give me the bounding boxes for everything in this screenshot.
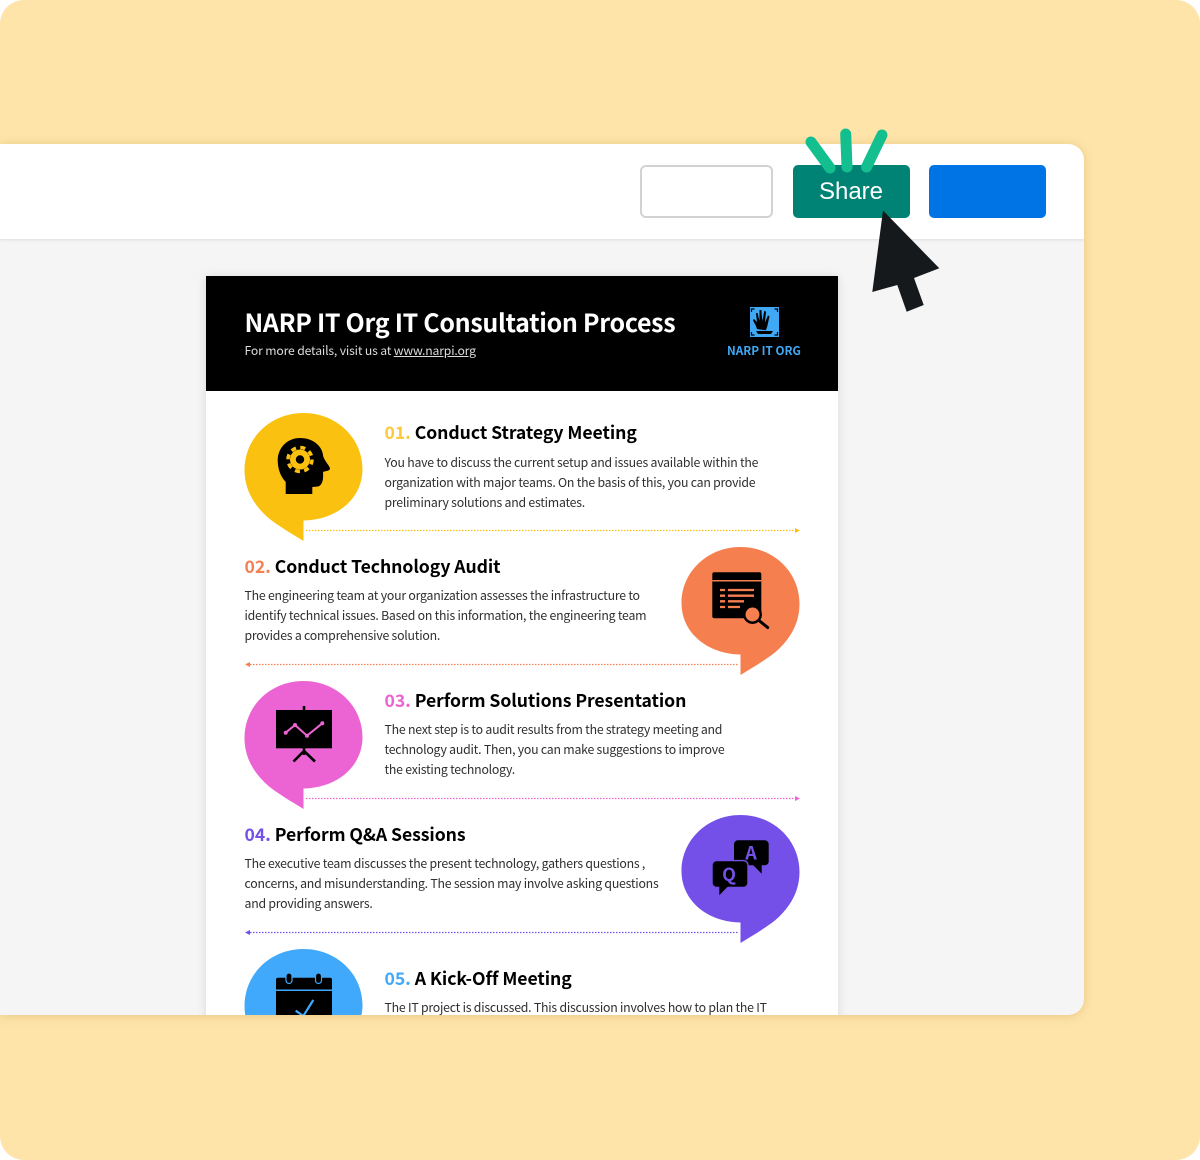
- step 4 text: The executive team discusses the present technology, gathers questions ,: [244, 854, 645, 872]
- blue button: [929, 165, 1046, 218]
- step 4 bubble with Q&A icon: [682, 815, 800, 943]
- panel: browser window: [0, 144, 1084, 1015]
- step 2 text: provides a comprehensive solution.: [244, 626, 440, 644]
- icon: document search: [712, 572, 768, 628]
- step 1 text: You have to discuss the current setup and issues available within the: [384, 453, 758, 471]
- step 3 text: The next step is to audit results from the strategy meeting and: [384, 720, 722, 738]
- panel: toolbar: [0, 144, 1084, 239]
- panel: document: [206, 276, 838, 1036]
- icon: head with gear: [278, 438, 330, 494]
- empty outline button: [640, 165, 773, 218]
- step 1 text: organization with major teams. On the basis of this, you can provide: [384, 473, 755, 491]
- step 2 bubble with audit icon: [682, 547, 800, 675]
- document header: [206, 276, 838, 391]
- logo wordmark: NARP IT ORG: [727, 342, 801, 359]
- step 4 arrow: [245, 930, 738, 935]
- step 4 text: and providing answers.: [244, 894, 373, 912]
- step 3 arrow: [306, 796, 800, 801]
- step 3 bubble with presentation icon: [244, 681, 362, 809]
- step 4 text: concerns, and misunderstanding. The session may involve asking questions: [244, 874, 658, 892]
- icon: logo hand: [750, 307, 779, 337]
- step 3 text: [384, 720, 724, 778]
- step 1 text: preliminary solutions and estimates.: [384, 493, 585, 511]
- step 2 text: [244, 586, 646, 644]
- step 2 arrow: [245, 662, 738, 667]
- icon: mouse cursor: [872, 210, 939, 312]
- step 1 heading: 01. Conduct Strategy Meeting: [384, 420, 637, 445]
- icon: question and answer chat: A: [744, 840, 757, 866]
- step 4 heading: 04. Perform Q&A Sessions: [244, 822, 466, 847]
- step 1 arrow: [306, 528, 800, 533]
- icon: question and answer chat: [712, 840, 769, 895]
- icon: question and answer chat: Q: [722, 861, 736, 887]
- step 3 text: the existing technology.: [384, 760, 515, 778]
- step 2 text: identify technical issues. Based on this information, the engineering team: [244, 606, 646, 624]
- subtitle: For more details, visit us at www.narpi.org: [244, 341, 476, 359]
- step 4 text: [244, 854, 658, 912]
- title: NARP IT Org IT Consultation Process: [244, 304, 675, 340]
- step 3 text: technology audit. Then, you can make suggestions to improve: [384, 740, 724, 758]
- step 1 text: [384, 453, 758, 511]
- share button: Share: [819, 178, 883, 205]
- step 5 heading: 05. A Kick-Off Meeting: [384, 966, 572, 991]
- step 3 heading: 03. Perform Solutions Presentation: [384, 688, 686, 713]
- step 1 bubble with head icon: [244, 413, 362, 541]
- step 2 heading: 02. Conduct Technology Audit: [244, 554, 501, 579]
- step 2 text: The engineering team at your organization assesses the infrastructure to: [244, 586, 640, 604]
- icon: calendar check: [276, 973, 332, 1024]
- share button: [792, 165, 910, 218]
- icon: presentation board: [276, 706, 332, 762]
- icon: green click sparks: [811, 134, 882, 168]
- step 5 bubble with calendar icon: [244, 949, 362, 1077]
